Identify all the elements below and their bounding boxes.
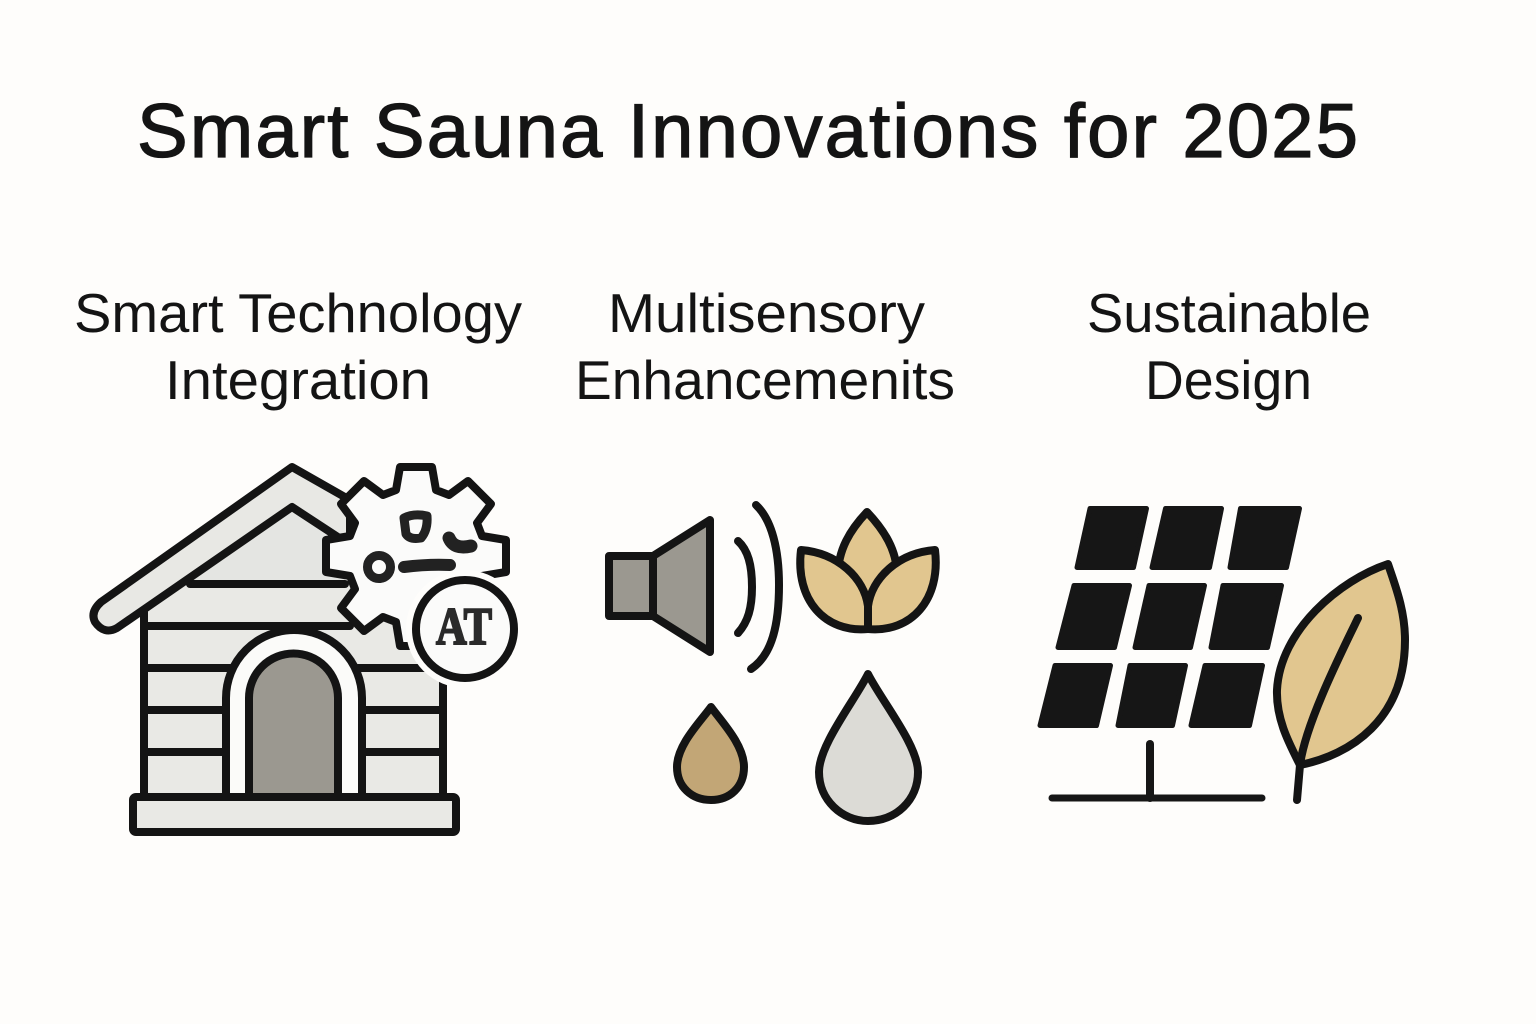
icon: solar panel [1040,508,1300,798]
roof [93,467,350,630]
heading: multisensory enhancements [575,282,955,411]
heading: sustainable design: Sustainable [1087,282,1371,344]
heading: smart technology integration: Smart Technology [74,282,522,344]
panel: multisensory enhancements [575,282,955,821]
panel: smart technology integration [74,282,524,832]
door [226,630,362,797]
icon: small drop [677,707,744,800]
heading: smart technology integration: Integration [165,349,431,411]
house body [144,584,443,797]
title: Smart Sauna Innovations for 2025 [137,89,1358,174]
base [133,797,456,832]
heading: sustainable design: Design [1145,349,1312,411]
AI badge: AT [436,598,492,656]
heading: smart technology integration [74,282,522,411]
gear [326,467,506,646]
icon: large drop [819,674,918,821]
heading: multisensory enhancements: Enhancemenits [575,349,955,411]
AI badge [406,570,524,688]
heading: sustainable design [1087,282,1371,411]
icon: leaf [1277,564,1405,800]
panel: sustainable design [1040,282,1405,800]
heading: multisensory enhancements: Multisensory [608,282,925,344]
icon: sauna house with AI gear [93,467,524,832]
icon: speaker [609,505,779,669]
icon: lotus [800,512,936,629]
